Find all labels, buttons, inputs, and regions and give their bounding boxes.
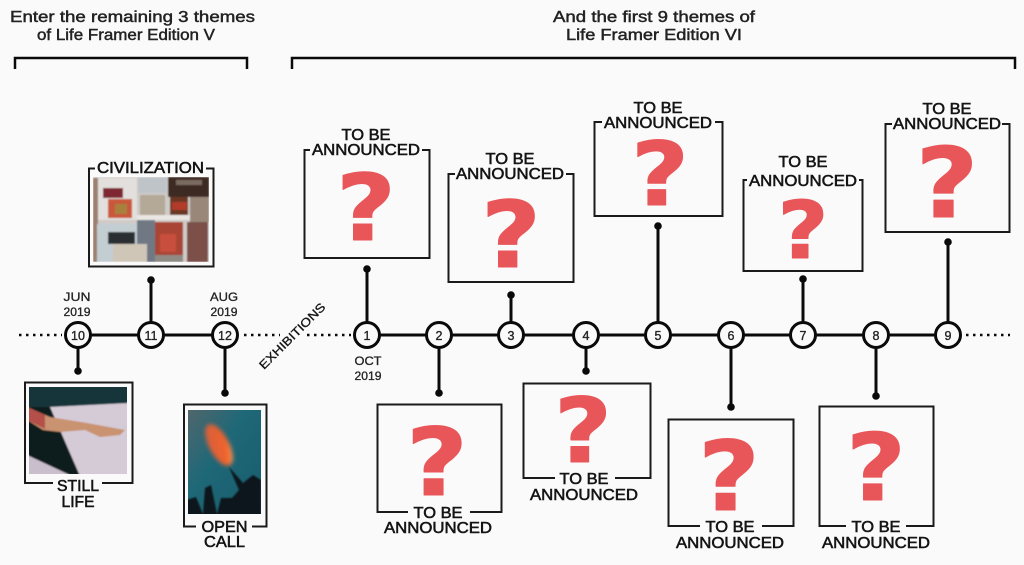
panel: theme 8 to be announced: [820, 406, 934, 552]
label: open call: OPEN: [202, 519, 248, 536]
heading: Edition VI themes: Life Framer Edition VI: [566, 27, 742, 44]
panel: theme 7 to be announced: ANNOUNCED: [749, 173, 857, 190]
node 2: [426, 322, 452, 348]
panel: civilization: CIVILIZATION: [97, 160, 204, 177]
panel: theme 5 to be announced: [594, 100, 722, 226]
node 2: 2: [436, 329, 443, 343]
node 3: 3: [508, 329, 515, 343]
node 6: 6: [728, 329, 735, 343]
panel: civilization: [89, 160, 214, 266]
panel: theme 5 to be announced: TO BE: [634, 100, 682, 117]
heading: Edition VI themes: [553, 9, 756, 44]
node 11: [138, 322, 164, 348]
photo: aerial view of rooms: [93, 177, 209, 262]
panel: theme 7 to be announced: TO BE: [778, 154, 828, 171]
date: Oct 2019: [354, 354, 382, 383]
label: open call: CALL: [204, 534, 245, 551]
panel: theme 5 to be announced: ANNOUNCED: [604, 115, 712, 132]
icon: question mark: ?: [631, 123, 689, 226]
panel: theme 2 to be announced: [378, 404, 502, 537]
date: Jun 2019: [64, 290, 91, 319]
node 9: 9: [945, 329, 952, 343]
node 1: 1: [364, 329, 371, 343]
panel: theme 4 to be announced: [524, 379, 650, 504]
label: open call: [202, 519, 248, 551]
timeline: dotted and solid lines: [19, 334, 1010, 336]
icon: question mark: ?: [406, 409, 468, 518]
icon: question mark: ?: [916, 127, 978, 240]
panel: theme 4 to be announced: ANNOUNCED: [530, 487, 638, 504]
icon: question mark: ?: [846, 414, 906, 522]
heading: Edition VI themes: And the first 9 themes of: [553, 9, 756, 26]
label: still life: STILL: [57, 478, 99, 495]
icon: question mark: ?: [778, 185, 828, 277]
node 3: [498, 322, 524, 348]
node 10: [66, 322, 90, 348]
panel: theme 1 to be announced: ANNOUNCED: [312, 142, 420, 159]
label: still life: [57, 478, 99, 511]
heading: Edition V themes: of Life Framer Edition V: [37, 27, 216, 44]
panel: theme 6 to be announced: TO BE: [706, 519, 754, 536]
label: exhibitions: EXHIBITIONS: [256, 300, 328, 372]
panel: theme 9 to be announced: TO BE: [922, 101, 972, 118]
panel: theme 9 to be announced: [886, 101, 1010, 240]
label: still life: LIFE: [62, 494, 94, 511]
node 7: [790, 322, 816, 348]
node 4: 4: [583, 329, 590, 343]
panel: theme 6 to be announced: [668, 420, 794, 552]
panel: theme 3 to be announced: ANNOUNCED: [456, 166, 564, 183]
bracket: Edition VI: [292, 58, 1015, 69]
node 4: [574, 322, 598, 348]
panel: theme 1 to be announced: TO BE: [342, 127, 390, 144]
panel: theme 2 to be announced: TO BE: [414, 505, 462, 522]
date: Aug 2019: 2019: [210, 305, 238, 319]
date: Jun 2019: 2019: [64, 305, 91, 319]
panel: theme 9 to be announced: ANNOUNCED: [893, 116, 1001, 133]
icon: question mark: ?: [481, 182, 541, 289]
heading: Edition V themes: [10, 9, 255, 44]
panel: theme 4 to be announced: TO BE: [560, 471, 608, 488]
icon: question mark: ?: [698, 421, 760, 533]
date: Aug 2019: AUG: [210, 290, 238, 304]
heading: Edition V themes: Enter the remaining 3 themes: [10, 9, 255, 26]
node 7: 7: [800, 329, 807, 343]
node 10: 10: [71, 329, 85, 343]
node 12: [212, 322, 238, 348]
photo: arm on white table: [27, 385, 129, 476]
node 6: [718, 322, 744, 348]
panel: theme 8 to be announced: TO BE: [852, 519, 900, 536]
node 12: 12: [218, 329, 232, 343]
photo: flare against teal sky: [186, 410, 261, 516]
node 9: [936, 322, 960, 348]
panel: theme 3 to be announced: [448, 151, 574, 289]
date: Oct 2019: 2019: [354, 369, 382, 383]
node 5: [646, 322, 670, 348]
panel: still life: [25, 382, 132, 511]
date: Aug 2019: [210, 290, 238, 319]
node 1: [354, 322, 380, 348]
panel: theme 6 to be announced: ANNOUNCED: [676, 535, 784, 552]
node 5: 5: [655, 329, 662, 343]
panel: theme 8 to be announced: ANNOUNCED: [822, 535, 930, 552]
icon: question mark: ?: [336, 155, 396, 262]
icon: question mark: ?: [554, 379, 612, 483]
panel: theme 2 to be announced: ANNOUNCED: [384, 520, 492, 537]
node 11: 11: [145, 329, 158, 343]
connectors with end dots: [74, 222, 952, 411]
panel: theme 7 to be announced: [744, 154, 862, 277]
node 8: [864, 322, 888, 348]
panel: theme 3 to be announced: TO BE: [486, 151, 534, 168]
node 8: 8: [873, 329, 880, 343]
panel: open call: [184, 404, 266, 551]
date: Jun 2019: JUN: [64, 290, 90, 304]
bracket: Edition V: [15, 58, 247, 69]
date: Oct 2019: OCT: [354, 354, 382, 368]
panel: theme 1 to be announced: [304, 127, 430, 262]
